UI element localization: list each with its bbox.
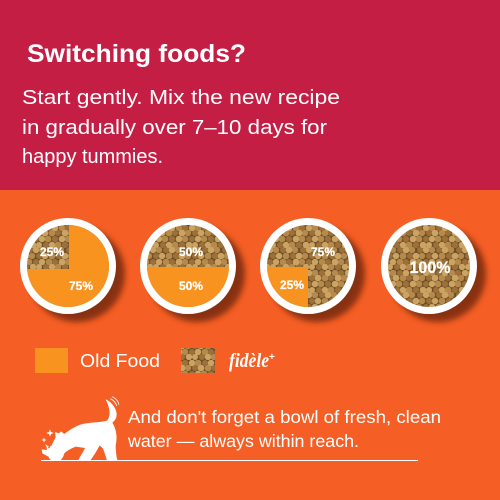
panel: red header (0, 0, 500, 190)
intro text (22, 87, 340, 168)
legend swatch: old food (35, 348, 68, 373)
intro text: in gradually over 7–10 days for (22, 117, 327, 139)
bowl: 75% new, 25% old: 75% (311, 247, 335, 259)
bowl: 50% new, 50% old: 50% (179, 281, 203, 293)
bowl: 25% new, 75% old (20, 218, 125, 322)
bowl: 25% new, 75% old: 75% (69, 281, 93, 293)
bowl: 75% new, 25% old (260, 218, 365, 322)
icon: dog drinking water (41, 397, 119, 460)
intro text: Start gently. Mix the new recipe (22, 87, 340, 109)
bowl: 50% new, 50% old (140, 218, 245, 322)
heading: Switching foods? (27, 40, 246, 68)
bowl: 25% new, 75% old: 25% (40, 247, 64, 259)
intro text: happy tummies. (22, 146, 163, 168)
bowl: 50% new, 50% old: 50% (179, 247, 203, 259)
reminder text (127, 407, 441, 451)
legend (35, 348, 275, 373)
legend label: brand: fidèle (229, 350, 269, 372)
bowl: 100% new (381, 218, 486, 322)
reminder text: And don't forget a bowl of fresh, clean (128, 407, 441, 427)
reminder text: water — always within reach. (127, 431, 359, 451)
legend label: brand: + (269, 352, 275, 363)
legend swatch: kibble (181, 348, 215, 373)
bowl: 75% new, 25% old: 25% (280, 280, 304, 292)
bowl: 100% new: 100% (410, 258, 450, 277)
legend label: old food: Old Food (80, 351, 160, 371)
